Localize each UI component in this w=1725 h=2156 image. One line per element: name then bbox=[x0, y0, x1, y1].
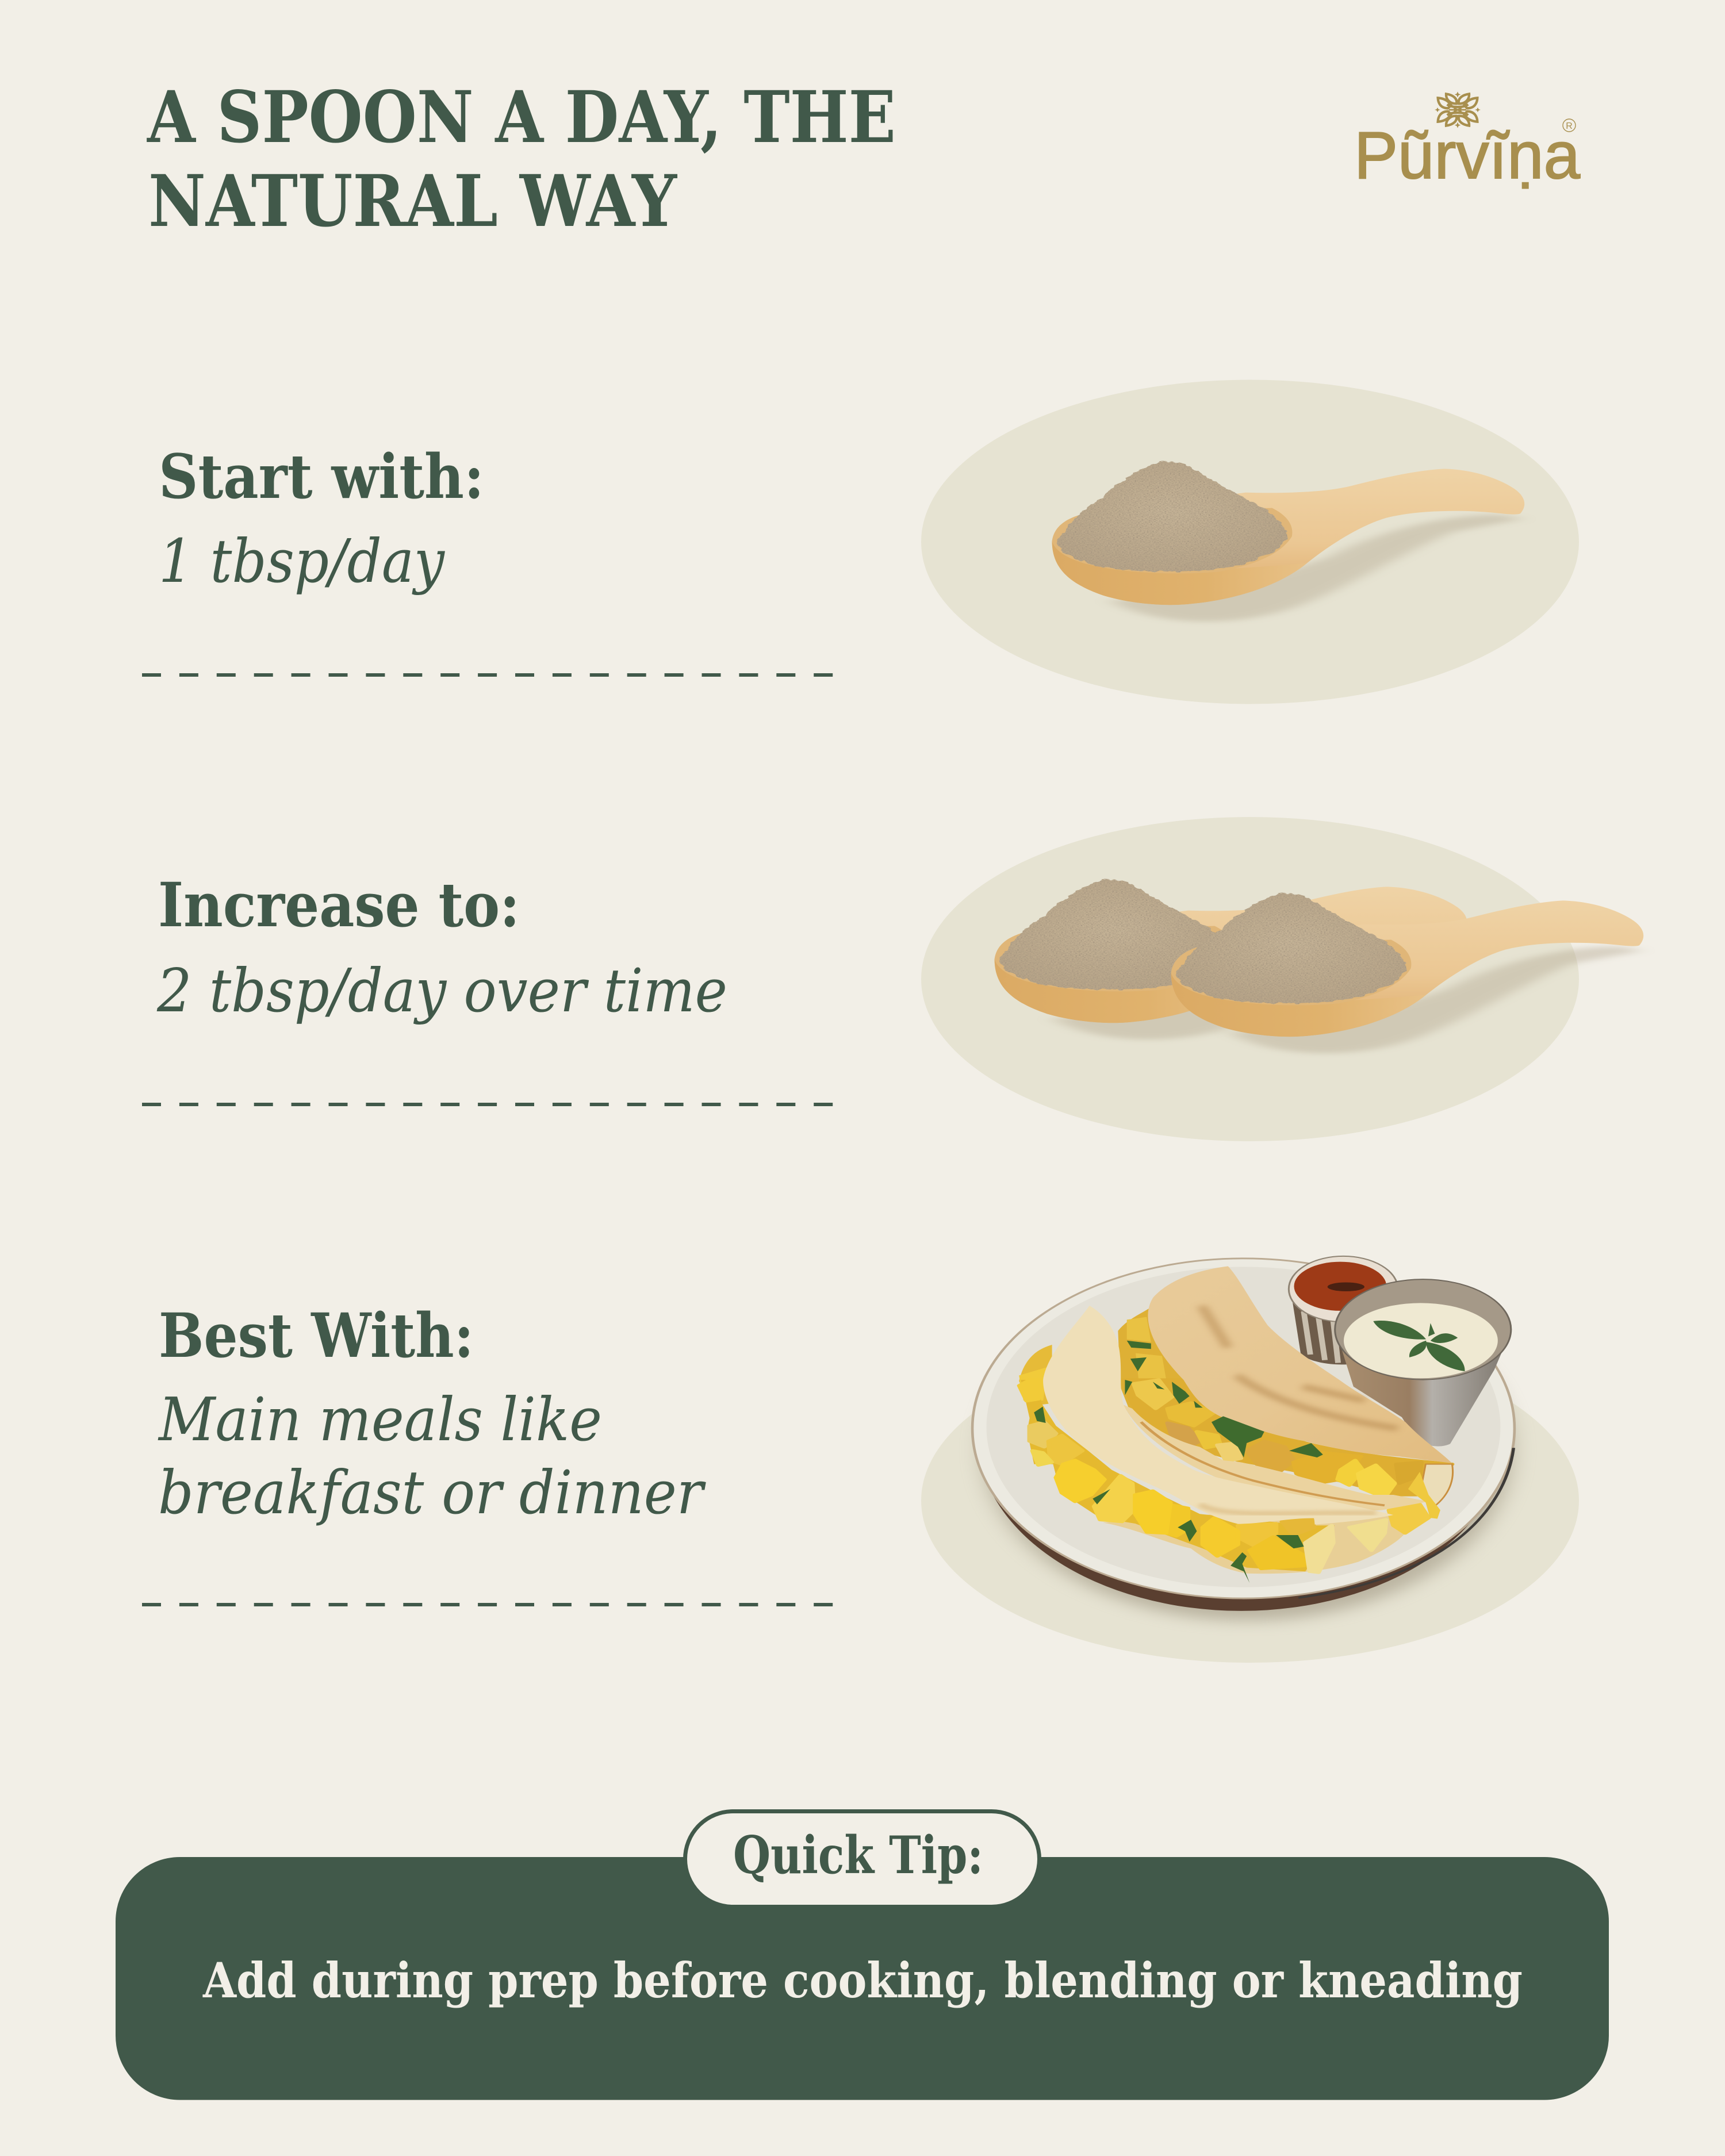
lower filling base bbox=[1021, 1380, 1335, 1571]
raita steel cup bbox=[1335, 1279, 1511, 1447]
lower potato chunks bbox=[1019, 1380, 1428, 1572]
upper filling base bbox=[1121, 1380, 1452, 1495]
browned edge of lip bbox=[1141, 1422, 1385, 1505]
filling under the dosas bbox=[1019, 1380, 1452, 1574]
dashed divider bbox=[142, 673, 834, 677]
logo: Purvina bbox=[1354, 91, 1580, 193]
lower lip of upper dosa bbox=[1124, 1405, 1428, 1510]
quick tip pill bbox=[685, 1811, 1040, 1906]
image: one spoon of powder bbox=[921, 379, 1579, 704]
meal suggestion: breakfast or dinner bbox=[158, 1457, 706, 1528]
dashed divider bbox=[142, 1103, 834, 1106]
meal suggestion bbox=[158, 1384, 706, 1528]
meal suggestion: Main meals like bbox=[158, 1384, 602, 1455]
heading: increase to: Increase to: bbox=[158, 869, 520, 941]
dose: 2 tbsp/day over time: 2 tbsp/day over time bbox=[156, 956, 727, 1026]
plate, cups and back filling bbox=[972, 1256, 1515, 1621]
dosa tip and drip bbox=[1408, 1464, 1453, 1519]
herb garnish bbox=[1034, 1380, 1323, 1583]
icon: wooden spoon with powder bbox=[1052, 462, 1524, 622]
section 1: start with bbox=[142, 440, 834, 675]
red chutney cup bbox=[1289, 1256, 1398, 1364]
backdrop ellipse bbox=[921, 379, 1579, 704]
plate bbox=[972, 1259, 1515, 1598]
heading: start with: Start with: bbox=[159, 440, 484, 512]
mint garnish bbox=[1373, 1321, 1465, 1371]
panel background bbox=[116, 1857, 1609, 2100]
quick tip body: Add during prep before cooking, blending or kneading bbox=[202, 1952, 1523, 2009]
plate base bbox=[977, 1260, 1505, 1611]
image: dosa plate bbox=[921, 1256, 1579, 1663]
heading: best with: Best With: bbox=[159, 1299, 474, 1371]
icon: front spoon bbox=[1171, 893, 1643, 1053]
section 2: increase to bbox=[142, 869, 834, 1104]
dashed divider bbox=[142, 1603, 834, 1606]
bottom dosa sheet bbox=[1103, 1514, 1405, 1574]
icon: back spoon bbox=[995, 880, 1467, 1039]
logo wordmark: Pũrvĩṇa bbox=[1354, 118, 1580, 193]
registered mark: R bbox=[1566, 121, 1573, 131]
registered mark bbox=[1563, 119, 1575, 132]
backdrop ellipse bbox=[921, 817, 1579, 1141]
herb garnish upper bbox=[1127, 1341, 1151, 1371]
back filling top bbox=[1019, 1309, 1189, 1414]
image: two spoons of powder bbox=[921, 817, 1643, 1141]
quick tip panel bbox=[116, 1811, 1609, 2100]
title: A SPOON A DAY, THE bbox=[147, 76, 896, 159]
title bbox=[147, 76, 896, 243]
plate shadow bbox=[984, 1281, 1512, 1621]
front dosa bbox=[1043, 1306, 1393, 1525]
quick tip label: Quick Tip: bbox=[733, 1825, 983, 1886]
title: NATURAL WAY bbox=[148, 160, 677, 243]
upper dosa bbox=[1148, 1266, 1452, 1463]
backdrop ellipse bbox=[921, 1338, 1579, 1663]
logo emblem bbox=[1435, 91, 1481, 128]
dose: 1 tbsp/day: 1 tbsp/day bbox=[159, 526, 445, 596]
upper potato chunks bbox=[1134, 1380, 1421, 1498]
section 3: best with bbox=[142, 1299, 834, 1605]
dosa flaps and front dosa bbox=[1034, 1306, 1453, 1583]
